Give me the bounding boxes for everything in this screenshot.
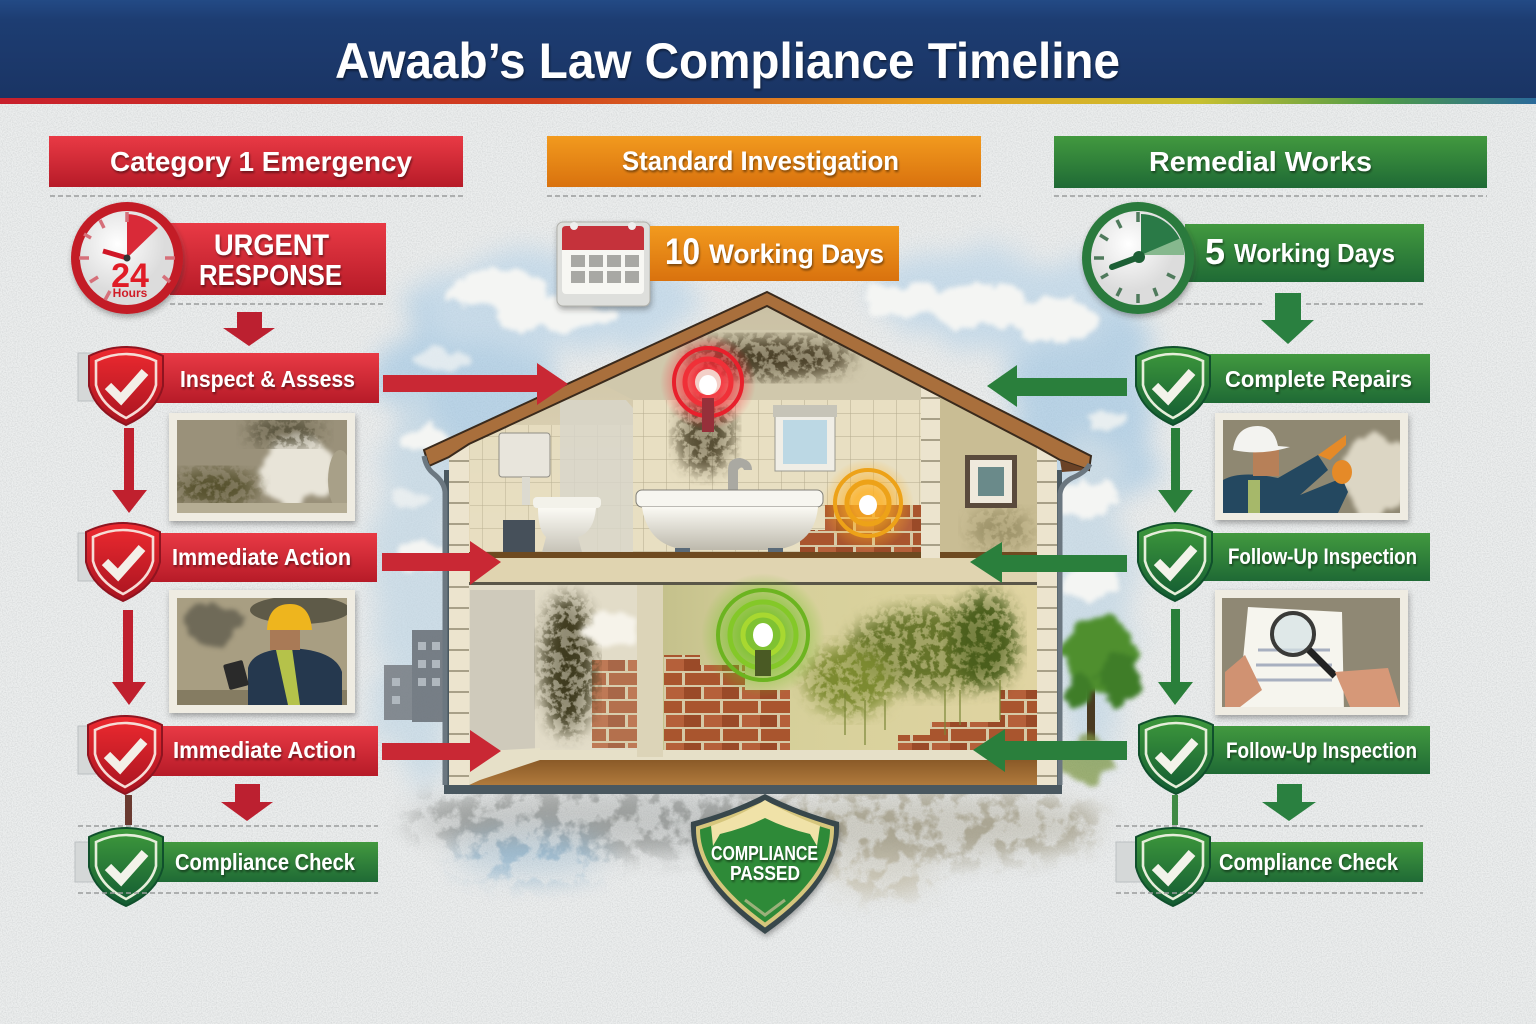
icon: window	[773, 405, 837, 471]
brick wall columns	[449, 445, 1057, 785]
banner: 5 working days	[1185, 224, 1424, 282]
arrow: immediate action down	[112, 610, 146, 705]
title: Awaab’s Law Compliance Timeline	[335, 33, 1120, 89]
arrow: down to complete repairs	[1261, 293, 1314, 344]
upper floor boards and slab	[469, 552, 1037, 585]
step: follow-up inspection two	[1139, 716, 1430, 794]
icon: 5 day clock	[1082, 202, 1194, 314]
step: immediate action one	[78, 523, 377, 601]
tree	[1059, 615, 1140, 782]
step: compliance check	[75, 828, 378, 906]
step: follow-up inspection one	[1138, 523, 1430, 601]
photo: worker repairing wall	[1215, 413, 1409, 520]
step: immediate action two: Immediate Action	[173, 737, 356, 763]
arrow: red to attic	[383, 363, 568, 405]
drain pipes	[424, 456, 1090, 785]
banner: 5 working days: Working Days	[1234, 238, 1395, 268]
column heading: standard investigation	[547, 136, 981, 187]
arrow: green to ground floor	[973, 729, 1127, 772]
sensor: red alert	[660, 334, 756, 432]
arrow: down to compliance check	[221, 784, 273, 821]
right column: remedial steps	[1082, 202, 1430, 906]
arrow: down to inspect	[223, 312, 275, 346]
connector to compliance check	[125, 795, 132, 825]
arrow: green to upper floor	[970, 542, 1127, 583]
photo: damaged wall	[169, 413, 355, 521]
step: compliance check	[1116, 828, 1423, 906]
step: complete repairs	[1136, 347, 1430, 425]
column heading: remedial works	[1054, 136, 1487, 188]
outer walls and base	[444, 470, 1062, 794]
ground watercolor stain	[410, 790, 1100, 893]
step: follow-up inspection two: Follow-Up Inspection	[1226, 738, 1417, 763]
left column: emergency steps	[71, 202, 386, 906]
arrow: inspect to immediate action	[112, 428, 147, 513]
ground floor rooms	[469, 585, 1037, 785]
compliance passed shield	[691, 794, 839, 934]
arrow: red to upper floor	[382, 541, 501, 585]
icon: 24 hour clock: Hours	[113, 286, 148, 300]
roof	[424, 292, 1091, 472]
house cutaway	[424, 292, 1091, 794]
step: follow-up inspection one: Follow-Up Inspection	[1228, 544, 1417, 569]
arrow: green to attic	[987, 365, 1127, 407]
arrow: down to compliance check	[1262, 784, 1316, 821]
banner: 10 working days: 10	[665, 231, 700, 272]
column heading: category 1 emergency	[49, 136, 463, 187]
distant building	[384, 630, 449, 722]
header banner	[0, 0, 1536, 104]
connector to compliance check	[1172, 795, 1178, 825]
watercolor sky behind house	[378, 250, 1155, 780]
compliance passed shield: PASSED	[730, 863, 800, 885]
column heading: category 1 emergency: Category 1 Emergency	[110, 146, 412, 177]
step: inspect and assess: Inspect & Assess	[180, 366, 355, 392]
icon: toilet	[499, 433, 601, 560]
arrow: follow-up down	[1158, 609, 1193, 705]
column heading: standard investigation: Standard Investigation	[622, 146, 899, 176]
icon: 24 hour clock: 24	[111, 257, 149, 295]
upper floor rooms	[469, 300, 1037, 560]
icon: framed picture	[965, 455, 1017, 508]
central column	[921, 388, 940, 558]
banner: 10 working days: Working Days	[709, 239, 884, 269]
step: complete repairs: Complete Repairs	[1225, 366, 1412, 392]
compliance passed shield: COMPLIANCE	[711, 843, 818, 865]
sensor: green alert	[701, 573, 825, 697]
calendar icon	[557, 222, 650, 306]
step: inspect and assess	[78, 347, 379, 425]
banner: urgent response: RESPONSE	[199, 260, 342, 292]
banner: 5 working days: 5	[1205, 231, 1225, 272]
photo: inspector with tablet	[169, 590, 355, 713]
arrow: red to ground floor	[382, 730, 501, 772]
step: immediate action one: Immediate Action	[172, 544, 351, 570]
step: compliance check: Compliance Check	[175, 849, 355, 875]
step: immediate action two	[78, 716, 378, 794]
step: compliance check: Compliance Check	[1219, 849, 1398, 875]
icon: 24 hour clock	[71, 202, 183, 314]
arrow: repairs to follow-up	[1158, 428, 1193, 513]
banner: 10 working days	[650, 226, 899, 281]
banner: urgent response	[170, 223, 386, 295]
icon: bathtub	[636, 458, 823, 563]
photo: clipboard and magnifier	[1215, 590, 1408, 715]
banner: urgent response: URGENT	[214, 229, 329, 262]
sensor: amber alert	[822, 459, 914, 551]
column heading: remedial works: Remedial Works	[1149, 146, 1372, 177]
